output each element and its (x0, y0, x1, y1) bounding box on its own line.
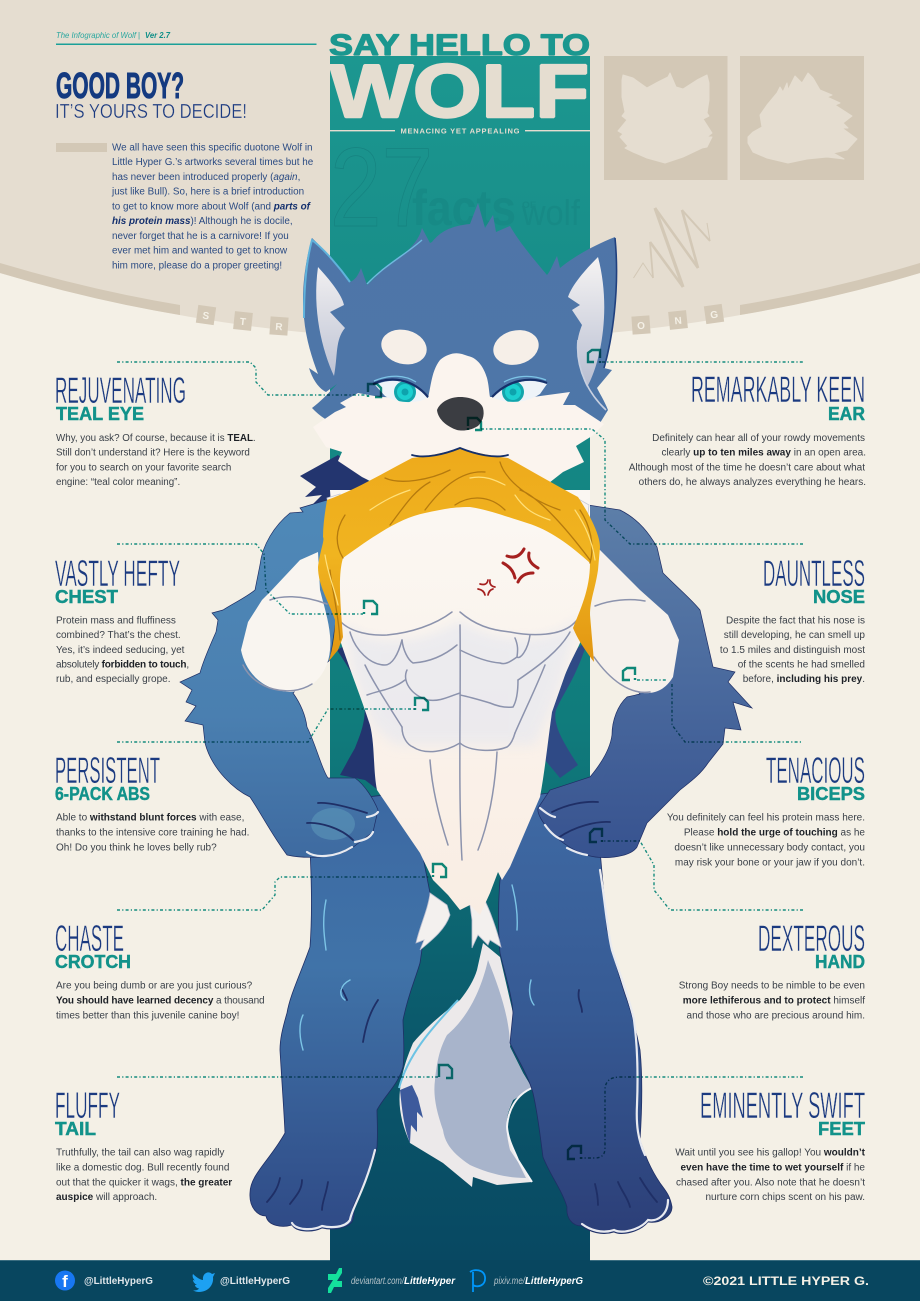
left biceps (241, 552, 330, 692)
text block: engine: “teal color meaning”. (56, 477, 180, 488)
left leg (250, 795, 430, 1231)
curved band right (740, 263, 920, 315)
icon: facebook (55, 1270, 75, 1291)
letter tiles: ONG: N (674, 316, 682, 327)
text block: absolutely forbidden to touch, (56, 660, 189, 670)
callout lines and markers (117, 350, 803, 1159)
subheading: BICEPS (797, 784, 865, 804)
panel: tail (55, 1085, 232, 1203)
panel: crotch (55, 918, 264, 1022)
text block: You definitely can feel his protein mass here. (667, 812, 865, 824)
left flank fur (337, 640, 385, 790)
anger vein marks (478, 549, 538, 595)
panel: nose (720, 553, 865, 685)
subheading: HAND (815, 952, 865, 972)
panel: chest (55, 553, 189, 685)
icon: twitter bird (193, 1272, 215, 1292)
subheading: yours to decide: IT’S YOURS TO DECIDE! (55, 101, 247, 123)
nose (437, 397, 484, 431)
title: say hello to wolf (329, 29, 590, 136)
panel: teal eye (55, 370, 256, 488)
header strip (56, 31, 316, 45)
text block: doesn’t like unnecessary body contact, you (674, 842, 865, 854)
right eye spot (490, 325, 542, 370)
background text: 27 facts of wolf: facts (412, 180, 516, 236)
yellow shirt (318, 449, 600, 662)
panel: abs: PERSISTENT (55, 750, 160, 791)
text block: like a domestic dog. Bull recently found (56, 1162, 229, 1174)
left inner ear (316, 267, 345, 376)
text block: clearly up to ten miles away in an open area. (661, 448, 866, 458)
white muzzle mask (313, 353, 604, 510)
text block: Able to withstand blunt forces with ease, (56, 812, 244, 824)
callout line: nose (468, 418, 803, 544)
callout line: teal eye (117, 362, 381, 397)
header strip: | (138, 31, 140, 40)
callout line: crotch (117, 864, 446, 910)
wolf head (303, 203, 617, 510)
icon: deviantart (328, 1268, 342, 1293)
text block: You should have learned decency a thousand (56, 996, 264, 1006)
leg details and toes (267, 870, 668, 1232)
left eye spot (378, 325, 430, 369)
background text: 27 facts of wolf: OF (522, 200, 537, 210)
intro text block: We all have seen this specific duotone Wolf in (112, 142, 313, 154)
callout line: biceps (623, 668, 803, 742)
head fur base (303, 203, 617, 423)
text block: and those who are precious around him. (687, 1010, 865, 1022)
text block: Yes, it’s indeed seducing, yet (56, 645, 185, 656)
facebook handle: @LittleHyperG (84, 1276, 153, 1287)
wolf illustration (180, 203, 752, 1234)
panel: chest: VASTLY HEFTY (55, 553, 180, 594)
subheading: 6-PACK ABS (55, 784, 150, 804)
silhouette panel: wolf head front (604, 56, 728, 180)
text block: Wait until you see his gallop! You wouldn’t (675, 1148, 865, 1158)
text block: Definitely can hear all of your rowdy movements (652, 433, 865, 444)
text block: times better than this juvenile canine boy! (56, 1010, 239, 1022)
copyright: ©2021 LITTLE HYPER G. (703, 1276, 869, 1288)
deviantart link: deviantart.com/LittleHyper (351, 1276, 456, 1287)
mouth (412, 448, 508, 456)
text block: Protein mass and fluffiness (56, 616, 176, 626)
intro text block: his protein mass)! Although he is docile, (112, 216, 293, 227)
title: say hello to wolf: WOLF (330, 49, 589, 133)
intro text block: has never been introduced properly (again, (112, 172, 300, 183)
intro accent bar (56, 143, 107, 152)
subheading: TAIL (55, 1119, 96, 1139)
right leg (498, 790, 672, 1234)
subheading: EAR (828, 404, 865, 424)
subheading: FEET (818, 1119, 865, 1139)
text block: more lethiferous and to protect himself (683, 996, 865, 1006)
text block: others do, he always analyzes everything he hears. (639, 477, 866, 488)
icon: facebook: f (62, 1272, 68, 1291)
text block: of the scents he had smelled (738, 660, 865, 670)
text block: for you to search on your favorite search (56, 462, 231, 474)
text block: may risk your bone or your jaw if you don’t. (675, 858, 865, 868)
top beige header area (0, 0, 920, 340)
text block: nurture corn chips scent on his paw. (705, 1192, 865, 1203)
panel: tail: FLUFFY (55, 1085, 120, 1126)
intro text block: to get to know more about Wolf (and parts of (112, 202, 310, 212)
crotch fur (416, 893, 501, 950)
curved band left (0, 263, 180, 315)
text block: combined? That’s the chest. (56, 630, 181, 641)
subheading: NOSE (813, 587, 865, 607)
right biceps (590, 540, 679, 693)
letter tiles: STR: T (239, 317, 246, 328)
letter tiles: ONG: G (710, 309, 719, 321)
callout line: tail (117, 1065, 452, 1078)
callout line: hand (590, 829, 803, 910)
panel: teal eye: REJUVENATING (55, 370, 186, 411)
header strip: Ver 2.7 (145, 31, 171, 40)
intro text block: him more, please do a proper greeting! (112, 260, 282, 272)
letter tiles: ONG: O (637, 321, 646, 332)
subheading: TEAL EYE (56, 404, 144, 424)
left arm (180, 500, 378, 857)
text block: Why, you ask? Of course, because it is TEAL. (56, 433, 256, 444)
muscle lines (243, 597, 650, 860)
torso (330, 490, 590, 915)
header strip: The Infographic of Wolf (56, 31, 137, 40)
text block: rub, and especially grope. (56, 674, 171, 685)
text block: thanks to the intensive core training he had. (56, 828, 249, 838)
right arm (538, 500, 752, 858)
panel: hand (679, 918, 865, 1022)
twitter handle: @LittleHyperG (220, 1276, 290, 1287)
right inner ear (568, 257, 604, 387)
tail (399, 943, 532, 1187)
text block: still developing, he can smell up (724, 630, 865, 641)
callout line: ear (588, 350, 803, 363)
panel: crotch: CHASTE (55, 918, 124, 959)
right flank fur (545, 640, 588, 778)
background text: 27 facts of wolf: 27 (330, 125, 433, 250)
panel: feet (675, 1085, 866, 1203)
panel: biceps (667, 750, 865, 868)
navy neck fur (300, 455, 370, 510)
background text: 27 facts of wolf: wolf (521, 192, 581, 233)
intro text block: Little Hyper G.’s artworks several times but he (112, 157, 314, 168)
text block: Truthfully, the tail can also wag rapidly (56, 1148, 224, 1158)
intro text block: ever met him and wanted to get to know (112, 246, 288, 257)
panel: ear (629, 369, 866, 488)
center teal column (330, 56, 590, 1261)
text block: even have the time to wet yourself if he (680, 1162, 865, 1174)
text block: Please hold the urge of touching as he (684, 828, 865, 838)
right eye (492, 376, 547, 403)
text block: Despite the fact that his nose is (726, 616, 865, 626)
hand details (307, 802, 610, 856)
text block: before, including his prey. (743, 674, 865, 685)
subheading: CROTCH (55, 952, 131, 972)
abs soft shading (348, 624, 574, 744)
title: say hello to wolf: MENACING YET APPEALING (400, 126, 520, 136)
icon: pixiv (470, 1270, 485, 1292)
text block: Still don’t understand it? Here is the keyword (56, 448, 250, 458)
pixiv link: pixiv.me/LittleHyperG (493, 1276, 583, 1287)
letter tiles: STR (196, 305, 289, 336)
text block: chased after you. Also note that he doesn’t (676, 1178, 865, 1188)
shirt sleeves (327, 494, 589, 533)
callout line: chest (117, 544, 377, 614)
text block: to 1.5 miles and distinguish most (720, 645, 865, 656)
panel: abs (55, 750, 249, 854)
silhouette panel: wolf head side (740, 56, 864, 180)
letter tiles: ONG (631, 304, 724, 335)
letter tiles: STR: R (275, 322, 284, 333)
letter tiles: STR: S (202, 311, 210, 322)
heading: good boy: GOOD BOY? (56, 65, 184, 106)
lightning zigzag decoration (634, 208, 710, 287)
intro text block: never forget that he is a carnivore! If you (112, 231, 289, 242)
left eye (373, 376, 428, 403)
intro text block: just like Bull). So, here is a brief introduction (111, 187, 304, 198)
text block: Oh! Do you think he loves belly rub? (56, 842, 217, 854)
text block: out that the quicker it wags, the greater (56, 1178, 232, 1188)
text block: Strong Boy needs to be nimble to be even (679, 980, 865, 992)
callout line: abs (117, 698, 428, 742)
text block: Although most of the time he doesn’t care about what (629, 462, 865, 474)
text block: auspice will approach. (56, 1192, 157, 1203)
text block: Are you being dumb or are you just curious? (56, 980, 253, 992)
title: say hello to wolf: SAY HELLO TO (329, 29, 590, 62)
background text: 27 facts of wolf (330, 125, 581, 250)
footer bar (0, 1260, 920, 1301)
subheading: CHEST (55, 587, 118, 607)
callout line: feet (568, 1077, 803, 1159)
